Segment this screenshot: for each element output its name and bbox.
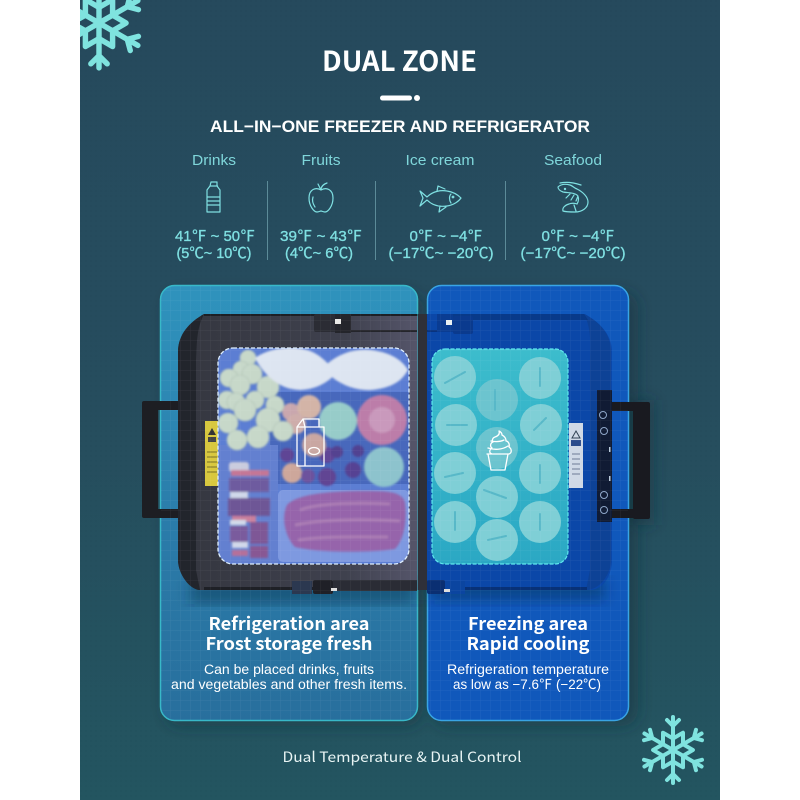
category: seafood: Seafood [544, 152, 602, 169]
icon: ice cream cone [487, 431, 511, 470]
category: fruits: (4℃~ 6℃) [285, 245, 353, 262]
fridge: warning label right [569, 423, 583, 488]
text: refrigeration description: and vegetables and other fresh items. [171, 677, 407, 692]
panel shadows [166, 292, 654, 726]
panel: refrigeration area [160, 286, 418, 720]
category: drinks: Drinks [192, 152, 236, 169]
icon: snowflake bottom-right [641, 717, 705, 783]
panel: freezing area [428, 286, 628, 720]
category: fruits: Fruits [302, 152, 340, 169]
text: freezing description: Refrigeration temperature [447, 662, 609, 677]
food: white bags [255, 348, 408, 390]
category: drinks: 41℉ ~ 50℉ [175, 228, 255, 245]
category: seafood [520, 152, 626, 262]
icon: snowflake top-left [80, 0, 142, 71]
background panel [80, 0, 720, 800]
fridge: left handle [142, 401, 180, 518]
title divider [380, 95, 420, 101]
footer text: Dual Temperature & Dual Control [282, 747, 522, 767]
icon: fish [420, 186, 461, 212]
category: fruits: 39℉ ~ 43℉ [280, 228, 362, 245]
text: refrigeration description [171, 662, 407, 692]
category: seafood: (−17℃~ −20℃) [520, 245, 626, 262]
category: drinks: (5℃~ 10℃) [176, 245, 252, 262]
text: freezing heading: Rapid cooling [466, 631, 590, 656]
text: refrigeration heading: Refrigeration area [208, 611, 370, 636]
food: steak [284, 491, 406, 552]
text: freezing description [447, 662, 609, 692]
category: seafood: 0℉ ~ −4℉ [542, 228, 614, 245]
icon: bottle [207, 182, 220, 212]
compartment: freezer contents [432, 349, 568, 564]
compartment: refrigerator contents [218, 348, 409, 564]
icon: milk carton [297, 419, 324, 466]
fridge: control strip [597, 390, 612, 522]
category: ice cream: Ice cream [406, 152, 474, 169]
fridge: warning label left [205, 421, 219, 486]
category: ice cream [388, 152, 494, 262]
icon: apple [309, 183, 333, 212]
text: refrigeration heading [206, 611, 372, 656]
category: ice cream: (−17℃~ −20℃) [388, 245, 494, 262]
category: drinks [175, 152, 255, 262]
fridge: body right half [427, 314, 612, 594]
title: DUAL ZONE [322, 40, 477, 80]
food: grapes [218, 350, 293, 450]
category: ice cream: 0℉ ~ −4℉ [410, 228, 482, 245]
text: refrigeration heading: Frost storage fresh [206, 631, 372, 656]
text: refrigeration description: Can be placed drinks, fruits [204, 662, 374, 677]
fridge cast shadow [190, 578, 605, 604]
icon: shrimp [558, 182, 588, 212]
fridge: body left half [178, 314, 418, 594]
text: freezing heading: Freezing area [468, 611, 588, 636]
food: skewers [228, 462, 270, 558]
text: freezing description: as low as −7.6℉ (−22℃) [453, 677, 601, 692]
subtitle: ALL−IN−ONE FREEZER AND REFRIGERATOR [210, 117, 590, 136]
grid overlays [161, 286, 628, 720]
category: fruits [280, 152, 362, 262]
food: fruit [280, 395, 407, 487]
text: freezing heading [466, 611, 590, 656]
fridge: right handle [612, 402, 650, 519]
fridge: seam band between panels [418, 314, 427, 590]
